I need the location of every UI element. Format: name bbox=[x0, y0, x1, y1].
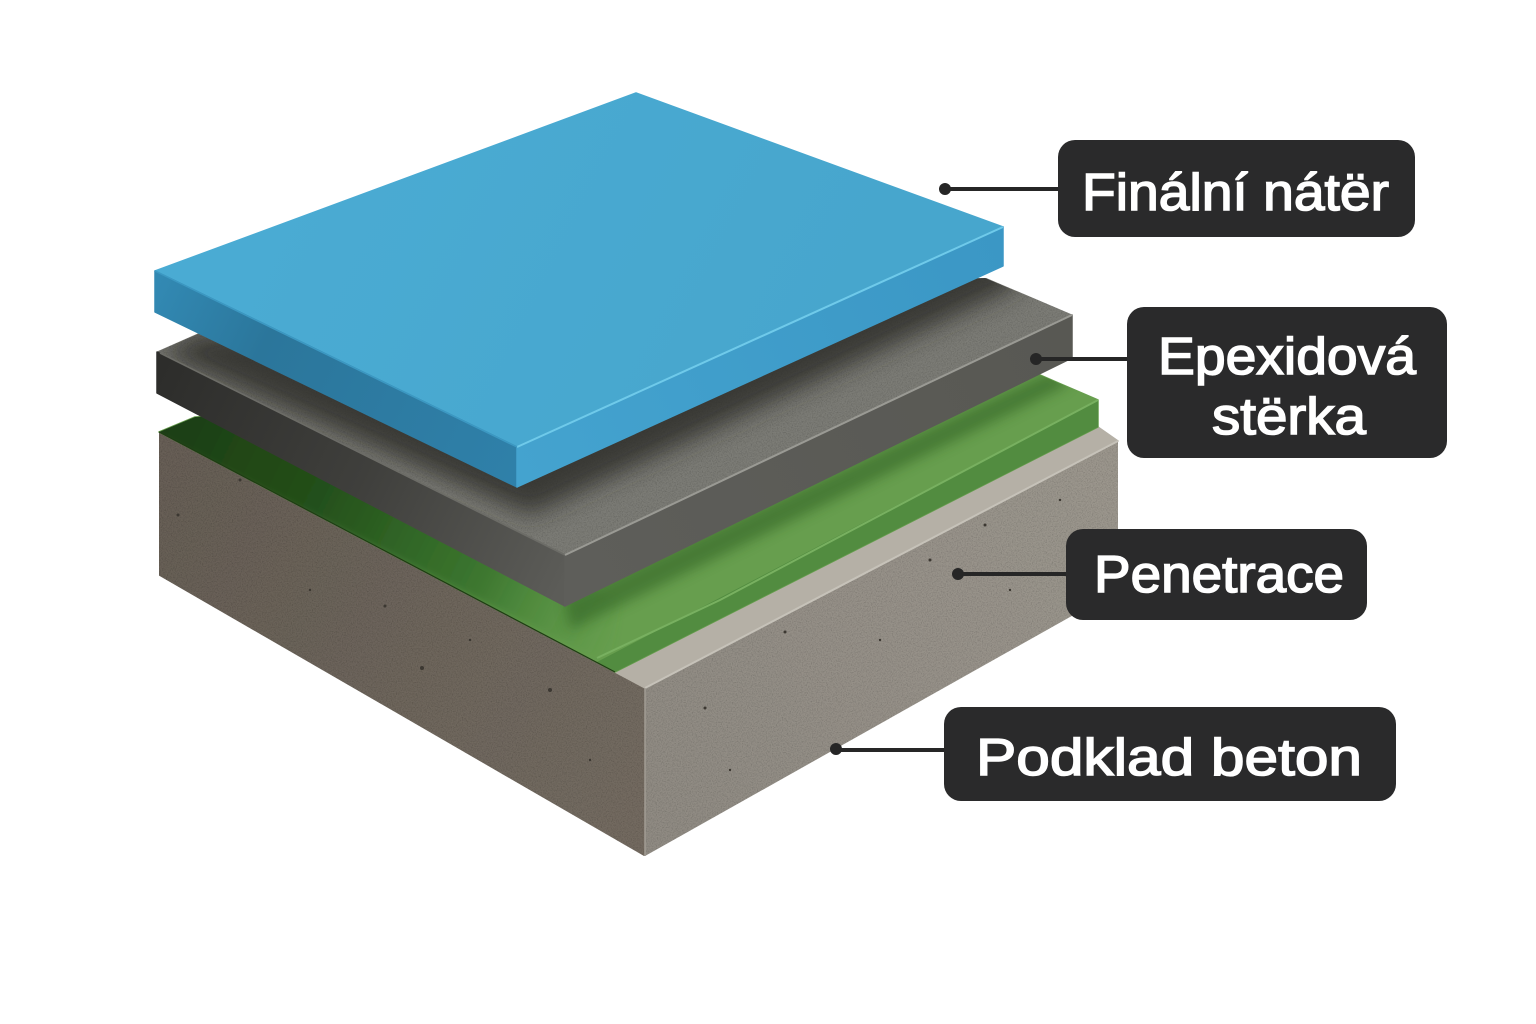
callout: Epexidová stěrka: stërka bbox=[1212, 388, 1366, 446]
layer: blue finish coat bbox=[155, 93, 1003, 487]
layer: gray epoxy screed bbox=[157, 240, 1072, 606]
callout: Penetrace: Penetrace bbox=[1094, 546, 1344, 604]
callout: Finální nátěr: Finální nátër bbox=[1082, 164, 1389, 222]
layered floor diagram bbox=[140, 93, 1118, 856]
callout: Podklad beton bbox=[830, 707, 1396, 801]
callout: Podklad beton: Podklad beton bbox=[976, 729, 1362, 787]
layer: green primer bbox=[140, 372, 1098, 672]
layer: concrete base bbox=[159, 427, 1118, 856]
callout: Epexidová stěrka bbox=[1030, 307, 1447, 458]
callout: Epexidová stěrka: Epexidová bbox=[1158, 328, 1416, 386]
callout: Finální nátěr bbox=[939, 140, 1415, 237]
callout: Penetrace bbox=[952, 529, 1367, 620]
